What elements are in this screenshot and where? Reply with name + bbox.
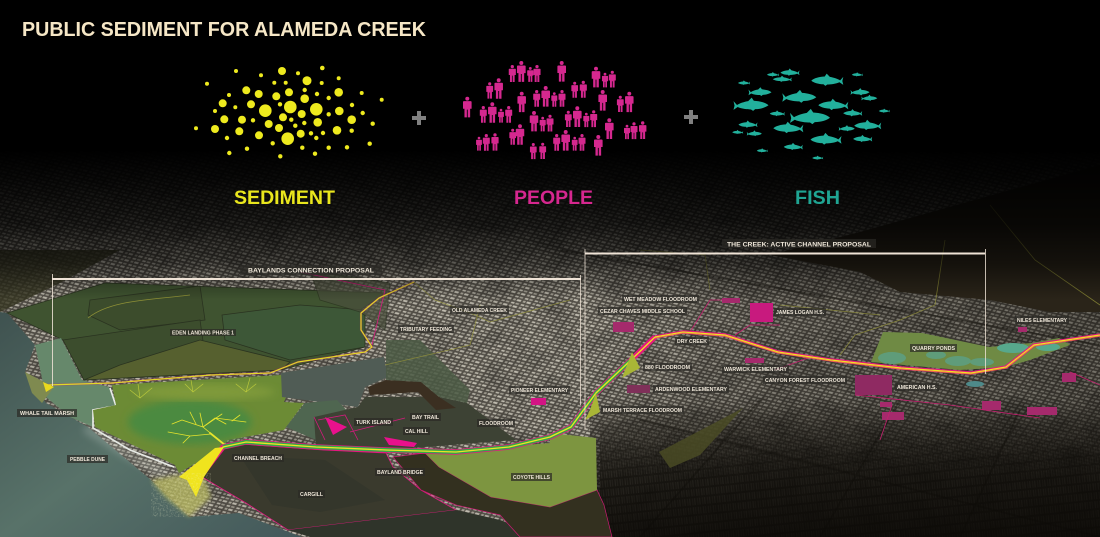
Whale Tail marsh: [25, 372, 54, 403]
label: baylands connection proposal: BAYLANDS CONNECTION PROPOSAL: [248, 268, 374, 274]
grey-blue ponds: [281, 357, 388, 407]
marsh strip: [35, 338, 116, 427]
label: cal hill: CAL HILL: [405, 429, 429, 435]
label: cal hill: [403, 427, 430, 435]
icon: plus sign: [412, 111, 426, 125]
main creek channel: [200, 332, 1100, 477]
label: whale tail marsh: WHALE TAIL MARSH: [20, 411, 74, 417]
label: old alameda creek: OLD ALAMEDA CREEK: [452, 308, 507, 314]
label: wet meadow floodroom: WET MEADOW FLOODROOM: [624, 297, 697, 303]
Whale Tail outlet: [43, 382, 54, 392]
yellow tree channels: [130, 378, 256, 445]
label: american h.s.: AMERICAN H.S.: [897, 385, 937, 391]
panel: aerial map: [0, 168, 1100, 537]
label: turk island: TURK ISLAND: [356, 420, 391, 426]
beach surf: [93, 388, 174, 467]
upper yellow channel: [46, 282, 414, 385]
pink roads and yellow lines: [88, 205, 1100, 440]
label: pebble dune: [67, 455, 108, 463]
label: niles elementary: NILES ELEMENTARY: [1017, 318, 1067, 324]
label: pebble dune: PEBBLE DUNE: [70, 457, 105, 463]
Quarry Ponds: [871, 332, 1070, 370]
label: cargill: CARGILL: [300, 492, 324, 498]
icon: fish school: [732, 69, 890, 160]
sediment fan: [151, 473, 211, 517]
label: ardenwood elementary: ARDENWOOD ELEMENTARY: [655, 387, 727, 393]
title: PUBLIC SEDIMENT FOR ALAMEDA CREEK: [22, 19, 427, 41]
top fade: [0, 0, 1100, 300]
label: marsh terrace floodroom: MARSH TERRACE FLOODROOM: [603, 408, 682, 414]
floodroom pink patches: [325, 298, 1076, 447]
label: floodroom: FLOODROOM: [479, 421, 513, 427]
label: cargill: [298, 490, 325, 498]
urban fabric: [0, 130, 1100, 537]
label: quarry ponds: [910, 344, 957, 352]
label: bayland bridge: BAYLAND BRIDGE: [377, 470, 423, 476]
label: the creek active channel proposal: THE CREEK: ACTIVE CHANNEL PROPOSAL: [727, 242, 871, 248]
heading: fish: FISH: [795, 188, 840, 209]
Coyote Hills: [393, 453, 612, 537]
Cargill ponds: [202, 443, 456, 530]
Turk Island area: [314, 397, 516, 450]
dark hills upper right: [770, 165, 1100, 312]
bracket: baylands connection proposal: [52, 274, 581, 405]
label: dry creek: DRY CREEK: [677, 339, 707, 345]
heading: sediment: SEDIMENT: [234, 188, 335, 209]
label: american h.s.: [895, 383, 939, 391]
label: whale tail marsh: [17, 409, 77, 417]
label: pioneer elementary: [509, 386, 570, 394]
delta core: [179, 447, 224, 497]
label: coyote hills: COYOTE HILLS: [513, 475, 550, 481]
label: the creek active channel proposal: [722, 239, 876, 248]
bracket: the creek active channel proposal: [584, 249, 986, 429]
icon: plus sign: [684, 110, 698, 124]
salt ponds: Eden Landing: [7, 270, 390, 380]
label: old alameda creek: [450, 306, 509, 314]
label: bay trail: BAY TRAIL: [412, 415, 440, 421]
bright green marsh: [93, 375, 304, 473]
label: warwick elementary: WARWICK ELEMENTARY: [724, 367, 787, 373]
icon: sediment dots: [194, 66, 384, 158]
label: baylands connection proposal: [240, 265, 382, 275]
label: channel breach: CHANNEL BREACH: [234, 456, 282, 462]
label: cezar chaves middle school: CEZAR CHAVES MIDDLE SCHOOL: [600, 309, 686, 315]
label: quarry ponds: QUARRY PONDS: [912, 346, 955, 352]
label: 880 floodroom: 880 FLOODROOM: [645, 365, 690, 371]
label: eden landing phase 1: EDEN LANDING PHASE 1: [172, 330, 234, 336]
label: bay trail: [410, 413, 441, 421]
bay water: [0, 312, 302, 537]
label: canyon forest floodroom: CANYON FOREST FLOODROOM: [765, 378, 845, 384]
label: tributary feeding: TRIBUTARY FEEDING: [400, 327, 452, 333]
heading: people: PEOPLE: [514, 188, 593, 209]
label: dry creek: [675, 337, 709, 345]
label: pioneer elementary: PIONEER ELEMENTARY: [511, 388, 568, 394]
label: james logan h.s.: JAMES LOGAN H.S.: [776, 310, 824, 316]
icon: people crowd: [463, 61, 646, 159]
